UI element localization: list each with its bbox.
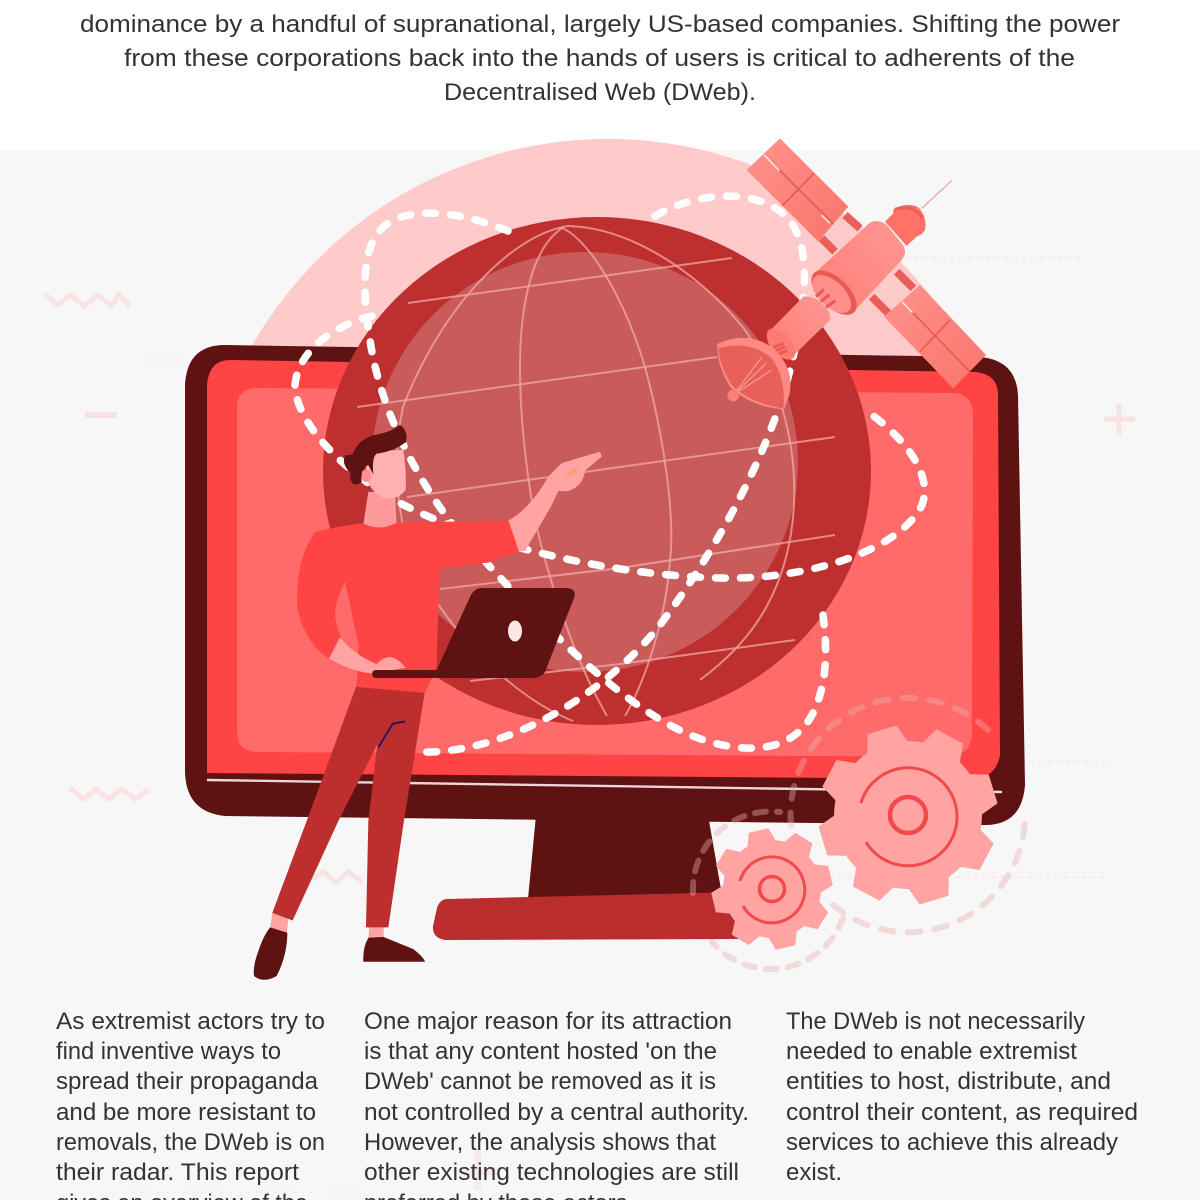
satellite dish	[717, 338, 791, 409]
intro text: dominance by a handful of supranational, largely US-based companies. Shifting the power	[80, 11, 1120, 38]
lower solar panel	[884, 285, 986, 388]
monitor stand	[528, 815, 722, 899]
globe	[323, 217, 871, 725]
neck	[363, 492, 397, 530]
column one text: As extremist actors try to	[56, 1008, 325, 1035]
column two text: One major reason for its attraction	[364, 1008, 732, 1035]
pointing arm	[508, 452, 602, 551]
laptop screen	[433, 588, 575, 678]
orbit b	[295, 316, 925, 578]
inner arm	[335, 582, 359, 649]
monitor screen highlight	[237, 388, 973, 757]
intro text	[80, 11, 1120, 106]
column two text: DWeb' cannot be removed as it is	[364, 1068, 716, 1095]
background decorations	[45, 258, 1135, 1192]
column two text: not controlled by a central authority.	[364, 1099, 749, 1126]
shoes	[254, 927, 287, 980]
laptop	[372, 588, 575, 678]
small gear	[710, 827, 834, 951]
orbit a	[365, 213, 826, 748]
column one text: their radar. This report	[56, 1159, 299, 1186]
ankles	[270, 913, 288, 936]
column two text	[364, 1008, 749, 1200]
laptop logo	[508, 620, 522, 642]
upper solar panel	[747, 138, 848, 242]
resting hand	[329, 637, 406, 674]
satellite top module	[885, 205, 925, 246]
column three text: exist.	[786, 1159, 842, 1186]
satellite struts	[822, 215, 913, 313]
monitor line	[207, 780, 1002, 792]
large gear	[816, 723, 1000, 907]
monitor screen	[207, 360, 1000, 779]
pink backdrop circle	[226, 139, 990, 400]
intro text: Decentralised Web (DWeb).	[444, 79, 756, 106]
column one text: spread their propaganda	[56, 1068, 319, 1095]
column three text: control their content, as required	[786, 1099, 1138, 1126]
monitor bezel	[185, 345, 1025, 825]
connector stubs	[773, 289, 835, 354]
column one text	[56, 1008, 325, 1200]
intro text: from these corporations back into the hands of users is critical to adherents of the	[124, 45, 1075, 72]
column two text: However, the analysis shows that	[364, 1129, 716, 1156]
person	[254, 425, 602, 980]
column three text: services to achieve this already	[786, 1129, 1118, 1156]
globe grid	[357, 226, 835, 721]
monitor	[185, 345, 1025, 940]
dish feed	[733, 357, 772, 395]
orbit c	[418, 196, 804, 752]
monitor base	[433, 892, 738, 940]
column one text: removals, the DWeb is on	[56, 1129, 325, 1156]
column three text: needed to enable extremist	[786, 1038, 1077, 1065]
satellite camera module	[767, 296, 830, 358]
laptop base	[372, 670, 502, 678]
satellite	[717, 138, 986, 409]
globe body	[323, 217, 871, 725]
column three text: The DWeb is not necessarily	[786, 1008, 1085, 1035]
gear orbit dashes	[693, 698, 1025, 969]
column two text: other existing technologies are still	[364, 1159, 739, 1186]
globe highlight	[372, 252, 798, 672]
satellite body	[813, 221, 905, 314]
column one text: find inventive ways to	[56, 1038, 281, 1065]
face	[365, 450, 406, 499]
dashed orbits	[295, 196, 925, 752]
column one text: and be more resistant to	[56, 1099, 316, 1126]
satellite antenna	[922, 181, 952, 208]
torso and arms	[297, 521, 519, 693]
column three text	[786, 1008, 1138, 1186]
pants	[272, 685, 425, 927]
column two text: is that any content hosted 'on the	[364, 1038, 717, 1065]
column three text: entities to host, distribute, and	[786, 1068, 1111, 1095]
pants crease	[378, 721, 405, 747]
hair	[344, 425, 407, 484]
